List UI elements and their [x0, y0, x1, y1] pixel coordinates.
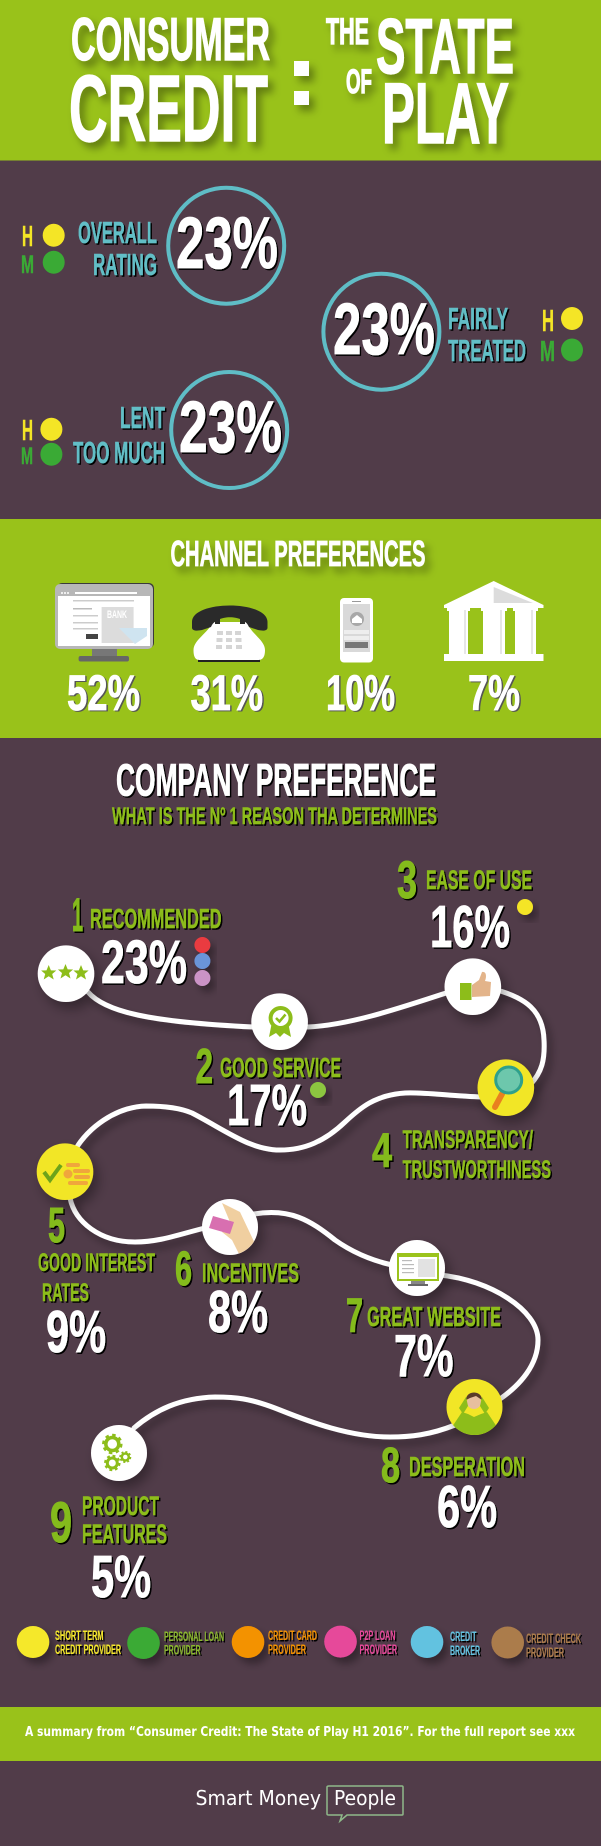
panel: header banner	[0, 0, 601, 162]
reason 9: product features: 9	[50, 1491, 72, 1555]
legend: provider types	[17, 1626, 581, 1660]
legend item: personal loan provider	[127, 1627, 224, 1659]
panel: headline ratings	[21, 188, 583, 488]
logo: Smart Money People: People	[334, 1786, 396, 1810]
reason 3: ease of use: 3	[397, 851, 417, 910]
icon: bank building	[444, 581, 544, 661]
stat: branch share: 7%	[468, 665, 520, 721]
logo: Smart Money People	[196, 1786, 403, 1821]
reason 8: desperation	[381, 1379, 525, 1540]
legend item: p2p loan provider	[324, 1626, 397, 1658]
stat: fairly treated: M	[540, 336, 555, 368]
route line connecting reasons	[70, 990, 544, 1437]
reason 6: incentives	[175, 1199, 299, 1345]
stat: lent too much	[21, 372, 287, 488]
reason 1: recommended: 1	[72, 888, 83, 941]
legend item: p2p loan provider: PROVIDER	[360, 1642, 397, 1657]
legend item: credit broker	[411, 1626, 480, 1658]
icon: telephone	[192, 606, 268, 662]
reason 1: recommended: 23%	[101, 928, 187, 997]
stat: lent too much: M	[21, 443, 33, 470]
icon: mobile phone	[340, 598, 373, 662]
reason 2: good service: 2	[196, 1040, 213, 1094]
reason 2: good service	[196, 993, 341, 1138]
reason 4: transparency: 4	[372, 1125, 392, 1178]
stat: overall rating: 23%	[176, 203, 278, 284]
icon: desktop monitor	[55, 583, 154, 662]
stat: lent too much: TOO MUCH	[73, 436, 165, 470]
title: CONSUMER	[71, 6, 270, 73]
legend item: personal loan provider: PERSONAL LOAN	[164, 1629, 224, 1644]
reason 6: incentives: 6	[175, 1243, 192, 1296]
reason 2: good service: GOOD SERVICE	[220, 1052, 341, 1083]
title: OF	[346, 63, 372, 101]
stat: fairly treated: 23%	[333, 289, 435, 370]
reason 8: desperation: 8	[381, 1439, 400, 1493]
reason 4: transparency	[372, 1059, 551, 1184]
legend item: credit check provider	[491, 1626, 581, 1660]
stat: fairly treated: H	[542, 304, 554, 338]
legend item: p2p loan provider: P2P LOAN	[360, 1628, 396, 1643]
reason 9: product features: FEATURES	[82, 1519, 167, 1549]
reason 3: ease of use	[397, 851, 533, 1015]
reason 7: great website: 7	[346, 1290, 363, 1343]
reason 1: recommended	[38, 888, 222, 1002]
stat: lent too much: LENT	[120, 401, 165, 435]
reason 8: desperation: 6%	[437, 1473, 497, 1540]
stat: overall rating: H	[22, 221, 33, 253]
reason 5: good interest rates: GOOD INTEREST	[38, 1249, 155, 1277]
reason 9: product features: PRODUCT	[82, 1491, 159, 1521]
title: THE	[326, 10, 369, 52]
reason 7: great website: 7%	[394, 1322, 454, 1389]
stat: website share: 52%	[67, 665, 140, 721]
reason 6: incentives: 8%	[208, 1278, 268, 1345]
legend item: personal loan provider: PROVIDER	[164, 1642, 201, 1658]
panel: channel preferences	[0, 519, 601, 738]
reason 9: product features: 5%	[91, 1543, 151, 1610]
legend item: short term credit provider: CREDIT PROVIDER	[55, 1642, 121, 1657]
logo: Smart Money People: Smart Money	[196, 1786, 321, 1810]
reason 2: good service: 17%	[227, 1073, 307, 1138]
reason 3: ease of use: 16%	[430, 893, 510, 960]
stat: fairly treated: FAIRLY	[448, 302, 508, 336]
panel: summary strip	[0, 1707, 601, 1761]
legend item: credit check provider: PROVIDER	[526, 1645, 564, 1660]
title: PLAY	[382, 66, 509, 162]
reason 5: good interest rates: 9%	[46, 1298, 106, 1365]
stat: overall rating: OVERALL	[78, 216, 157, 250]
reason 9: product features	[50, 1425, 167, 1610]
title	[69, 2, 514, 162]
title: CREDIT	[69, 56, 268, 162]
stat: overall rating: RATING	[93, 248, 157, 282]
icon: desktop monitor: BANK	[107, 609, 127, 621]
stat: lent too much: H	[22, 415, 33, 447]
stat: fairly treated	[323, 274, 583, 390]
legend item: credit card provider: CREDIT CARD	[268, 1628, 317, 1643]
reason 7: great website: GREAT WEBSITE	[367, 1301, 501, 1332]
stat: telephone share: 31%	[190, 665, 263, 721]
legend item: short term credit provider	[17, 1626, 121, 1658]
legend item: credit broker: BROKER	[450, 1643, 480, 1658]
reason 6: incentives: INCENTIVES	[202, 1258, 299, 1288]
stat: fairly treated: TREATED	[448, 334, 526, 368]
reason 5: good interest rates: 5	[48, 1199, 65, 1253]
legend item: credit broker: CREDIT	[450, 1629, 477, 1644]
reason 5: good interest rates	[37, 1143, 155, 1365]
stat: overall rating: M	[21, 251, 34, 279]
reason 7: great website	[346, 1240, 501, 1389]
reason 5: good interest rates: RATES	[42, 1279, 89, 1307]
stat: lent too much: 23%	[179, 387, 282, 468]
reason 1: recommended: RECOMMENDED	[90, 903, 222, 934]
legend item: short term credit provider: SHORT TERM	[55, 1628, 104, 1643]
legend item: credit card provider: PROVIDER	[268, 1642, 306, 1657]
legend item: credit card provider	[232, 1626, 317, 1658]
stat: mobile share: 10%	[326, 665, 395, 721]
stat: overall rating	[21, 188, 284, 304]
